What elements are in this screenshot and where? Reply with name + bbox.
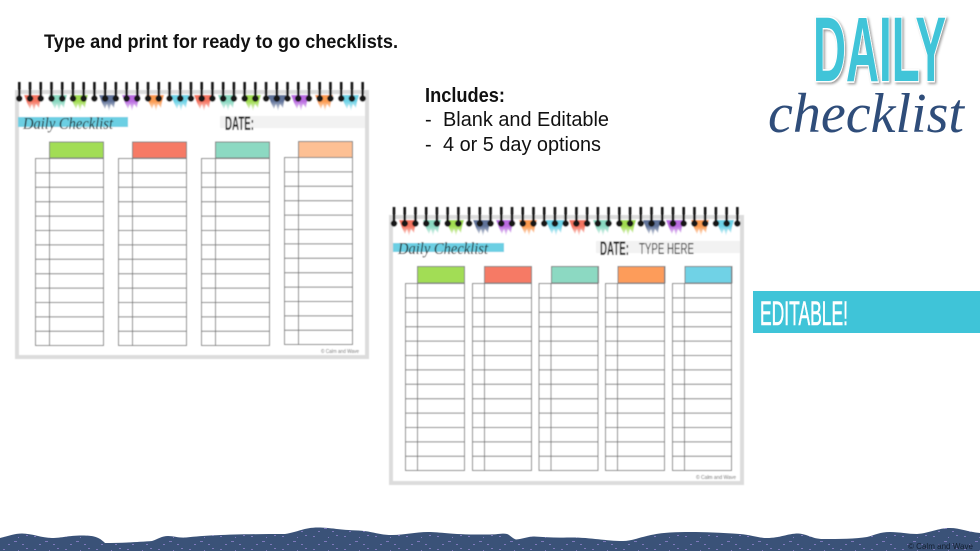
paint drips: [24, 95, 359, 111]
date value: TYPE HERE: [639, 241, 694, 258]
footer wave: [0, 528, 980, 551]
sheet frame: [17, 92, 367, 357]
title band: [18, 117, 128, 127]
title band: [393, 243, 504, 252]
sheet title: Daily Checklist: [397, 239, 489, 258]
wave speckle: [0, 528, 980, 551]
sheet title: Daily Checklist: [22, 114, 114, 133]
column headers: [50, 142, 352, 158]
includes item 2: -: [425, 134, 432, 156]
callout: editable: [753, 291, 980, 333]
date field: [596, 241, 740, 253]
copyright small: © Calm and Wave: [696, 474, 736, 481]
includes item 1: Blank and Editable: [443, 109, 609, 131]
logo word: checklist: checklist: [768, 83, 965, 145]
wave shape: [0, 528, 980, 551]
date label: DATE:: [600, 239, 629, 260]
panel: 5-day checklist sheet: [391, 207, 742, 483]
column headers: [418, 266, 732, 283]
panel: 4-day checklist sheet: [17, 82, 367, 357]
heading: type and print: Type and print for ready to go checklists.: [44, 31, 398, 53]
date label: DATE:: [225, 114, 254, 135]
checklist grids: [405, 266, 732, 471]
text block: includes: [425, 85, 609, 156]
copyright small: © Calm and Wave: [321, 348, 359, 355]
date field: [220, 116, 365, 128]
spiral binding: [394, 207, 737, 224]
copyright footer: © Calm and Wave: [908, 542, 974, 551]
paint drips: [399, 220, 734, 236]
checklist grids: [35, 141, 353, 346]
includes heading: Includes:: [425, 85, 505, 107]
spiral binding: [19, 82, 363, 99]
callout label: EDITABLE!: [760, 295, 848, 333]
logo: Daily Checklist: [768, 0, 965, 145]
sheet frame: [391, 217, 742, 483]
includes item 1: -: [425, 109, 432, 131]
callout bar: [753, 291, 980, 333]
includes item 2: 4 or 5 day options: [443, 134, 601, 156]
